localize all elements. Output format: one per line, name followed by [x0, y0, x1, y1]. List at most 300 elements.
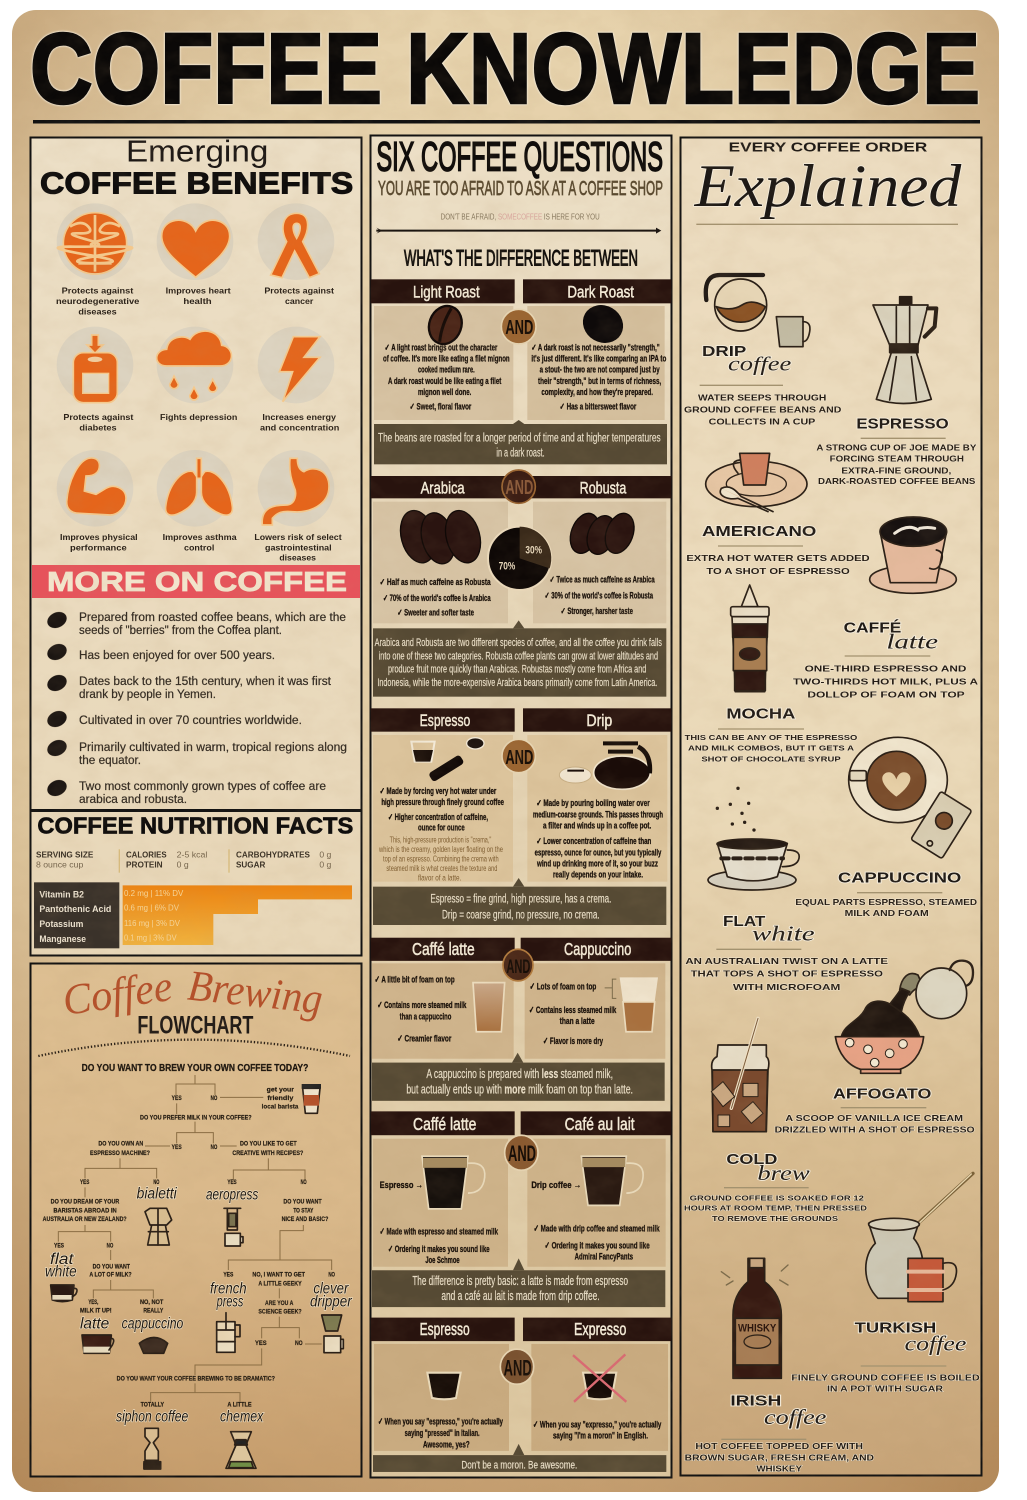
benefit labels: diseases	[279, 553, 316, 563]
flowchart questions and answers: DO YOU DREAM OF YOUR	[51, 1198, 119, 1205]
comparison: light roast and dark roast: AND	[505, 316, 533, 339]
nutrition table: Potassium	[39, 919, 83, 929]
item: affogato	[775, 961, 975, 1135]
icon: bialetti moka pot	[145, 1208, 172, 1245]
comparison: espresso and drip: a filter and winds up in a coffee pot.	[543, 820, 651, 830]
comparison: caffe latte and cappuccino: ✓ Contains less steamed milk	[529, 1005, 617, 1015]
flowchart questions and answers: NO	[153, 1179, 159, 1186]
benefit labels: Improves asthma	[163, 532, 237, 542]
flowchart questions and answers: YES	[223, 1272, 234, 1279]
item: cold brew: TO REMOVE THE GROUNDS	[712, 1214, 838, 1223]
comparison: arabica and robusta: Indonesia, while the more-expensive Arabica beans primarily come from Latin America.	[377, 677, 657, 689]
nutrition table: Vitamin B2	[39, 889, 84, 899]
comparison: espresso and drip: Drip = coarse grind, no pressure, no crema.	[442, 907, 600, 921]
comparison: light roast and dark roast: in a dark roast.	[496, 446, 545, 460]
pie chart: 70% arabica, 30% robusta: 30%	[525, 544, 542, 556]
flowchart questions and answers: TOTALLY	[141, 1402, 164, 1409]
item: mocha	[685, 585, 858, 763]
icon: moka pot	[873, 297, 936, 403]
icon: heart	[162, 220, 230, 277]
item: flat white: AN AUSTRALIAN TWIST ON A LATTE	[685, 956, 889, 966]
flowchart coffee names: dripper	[310, 1294, 352, 1311]
comparison: caffe latte and cafe au lait: Espresso →	[380, 1180, 423, 1190]
benefit labels: neurodegenerative	[56, 296, 140, 306]
benefit labels	[56, 285, 342, 563]
flowchart questions and answers: local barista	[262, 1103, 299, 1110]
comparison: light roast and dark roast: The beans are roasted for a longer period of time and at higher temperatures	[378, 431, 661, 445]
list: more on coffee facts: drank by people in Yemen.	[79, 689, 216, 701]
flowchart questions and answers: DO YOU WANT YOUR COFFEE BREWING TO BE DRAMATIC?	[117, 1376, 275, 1383]
item: caffe latte: ONE-THIRD ESPRESSO AND	[805, 664, 966, 674]
icon: caffe latte cup	[870, 517, 956, 593]
flowchart questions and answers: YES	[172, 1095, 182, 1102]
comparison: light roast and dark roast: ✓ A dark roast is not necessarily "strength,"	[531, 343, 660, 353]
pie chart: 70% arabica, 30% robusta: 70%	[499, 560, 516, 572]
comparison: light roast and dark roast: ✓ A light roast brings out the character	[385, 343, 498, 353]
item: irish coffee: WHISKEY	[756, 1463, 803, 1473]
comparison: espresso and expresso: AND	[504, 1357, 532, 1381]
nutrition summary: SUGAR	[236, 860, 265, 870]
icon: cold brew jar	[711, 1018, 769, 1132]
comparison: light roast and dark roast: ✓ Has a bittersweet flavor	[560, 401, 637, 411]
list: more on coffee facts: arabica and robusta.	[79, 794, 187, 806]
item: mocha: AND MILK COMBOS, BUT IT GETS A	[688, 744, 855, 753]
panel: every coffee order explained	[680, 138, 982, 1476]
benefit labels: Increases energy	[262, 412, 336, 422]
item: americano: TO A SHOT OF ESPRESSO	[706, 566, 850, 576]
item: mocha: THIS CAN BE ANY OF THE ESPRESSO	[685, 733, 858, 742]
comparison: caffe latte and cafe au lait: AND	[508, 1142, 536, 1166]
flowchart questions and answers: YES	[54, 1243, 64, 1250]
flowchart questions and answers: NO	[211, 1144, 217, 1151]
flowchart coffee names: french	[210, 1280, 247, 1297]
item: americano: AMERICANO	[702, 524, 816, 540]
item: espresso: ESPRESSO	[856, 416, 949, 432]
item: cappuccino: EQUAL PARTS ESPRESSO, STEAMED	[795, 897, 977, 907]
icon: takeaway cup	[302, 1084, 321, 1113]
icon: latte cup with espresso	[422, 1156, 485, 1209]
nutrition summary	[36, 849, 332, 873]
comparison: arabica and robusta: ✓ Sweeter and softer taste	[397, 608, 474, 618]
nutrition summary: PROTEIN	[126, 860, 163, 870]
heading: coffee brewing flowchart: Brewing	[186, 962, 325, 1023]
comparison: caffe latte and cappuccino: ✓ Creamier flavor	[397, 1033, 452, 1044]
flowchart questions and answers: NO, I WANT TO GET	[252, 1272, 305, 1279]
comparison: caffe latte and cappuccino: AND	[506, 956, 530, 978]
comparison: espresso and drip: Espresso	[420, 711, 470, 730]
nutrition summary: CALORIES	[126, 850, 167, 860]
benefit labels: health	[183, 296, 212, 306]
flowchart questions and answers: TO STAY	[293, 1207, 314, 1214]
comparison: caffe latte and cafe au lait: ✓ Ordering it makes you sound like	[388, 1244, 490, 1254]
item: cappuccino: CAPPUCCINO	[838, 870, 961, 886]
heading: coffee brewing flowchart: FLOWCHART	[137, 1011, 254, 1039]
flowchart coffee names: chemex	[220, 1409, 264, 1426]
comparison: espresso and expresso	[371, 1318, 671, 1472]
list: more on coffee facts: Two most commonly grown types of coffee are	[79, 781, 326, 793]
comparison: espresso and drip: ounce for ounce	[418, 823, 465, 833]
comparison: espresso and drip: wind up drinking more of it, so your buzz	[536, 859, 658, 869]
icon: espresso shot and portafilter	[411, 738, 484, 782]
item: irish coffee: coffee	[764, 1407, 826, 1429]
nutrition summary: 2-5 kcal	[177, 850, 207, 860]
flowchart questions and answers: DO YOU WANT	[93, 1263, 130, 1270]
panel: coffee brewing flowchart	[30, 962, 362, 1476]
flowchart coffee names: press	[216, 1294, 244, 1311]
comparison: arabica and robusta: into one of these two categories. Robusta coffee plants can grow at lower altitudes and	[379, 650, 658, 662]
benefit labels: performance	[70, 543, 127, 553]
item: flat white: WITH MICROFOAM	[733, 982, 840, 992]
icon: crossed-out expresso cup	[573, 1354, 626, 1402]
icon: cezve and mug	[866, 1173, 973, 1302]
comparison: espresso and drip: Espresso = fine grind, high pressure, has a crema.	[430, 891, 611, 905]
icon: drip carafe and mug	[706, 275, 810, 347]
item: drip coffee	[684, 275, 841, 427]
item: irish coffee: IRISH	[730, 1394, 781, 1410]
banner: more on coffee: MORE ON COFFEE	[47, 566, 347, 597]
item: caffe latte: CAFFÉ	[844, 619, 902, 636]
nutrition table: Manganese	[39, 934, 86, 944]
comparison: light roast and dark roast: Dark Roast	[567, 283, 634, 302]
item: caffe latte: latte	[886, 632, 938, 654]
list: more on coffee facts: Cultivated in over 70 countries worldwide.	[79, 715, 302, 727]
comparison: arabica and robusta: ✓ 30% of the world's coffee is Robusta	[545, 590, 654, 600]
flowchart questions and answers: A LOT OF MILK?	[89, 1272, 132, 1279]
icon: flat white cup and saucer	[708, 839, 799, 890]
comparison: arabica and robusta: Robusta	[580, 478, 627, 497]
comparison: arabica and robusta: ✓ Twice as much caffeine as Arabica	[550, 574, 655, 584]
comparison: arabica and robusta: Arabica	[421, 478, 465, 497]
comparison: light roast and dark roast: it's just different. It's like comparing an IPA to	[531, 354, 667, 364]
comparison: espresso and expresso: saying "I'm a moron" in English.	[553, 1430, 648, 1441]
item: americano: EXTRA HOT WATER GETS ADDED	[686, 553, 870, 563]
flowchart questions and answers: get your	[267, 1087, 294, 1094]
nutrition summary: 8 ounce cup	[36, 860, 84, 870]
benefit labels: Protects against	[62, 285, 134, 295]
comparison: espresso and expresso: ✓ When you say "expresso," you're actually	[533, 1419, 662, 1429]
flowchart coffee names: clever	[313, 1280, 349, 1297]
item: espresso: DARK-ROASTED COFFEE BEANS	[818, 476, 976, 486]
nutrition table: 0.2 mg | 11% DV	[124, 888, 184, 898]
list: more on coffee facts: Prepared from roasted coffee beans, which are the	[79, 612, 346, 624]
flowchart questions and answers: NO	[301, 1179, 307, 1186]
icon: cappuccino glass	[605, 977, 658, 1032]
item: cappuccino: MILK AND FOAM	[845, 908, 929, 918]
flowchart coffee names	[45, 1185, 352, 1426]
item: caffe latte: TWO-THIRDS HOT MILK, PLUS A	[793, 676, 978, 686]
item: affogato: A SCOOP OF VANILLA ICE CREAM	[785, 1113, 963, 1123]
comparison: light roast and dark roast: mignon well done.	[418, 387, 471, 397]
heading: coffee brewing flowchart: DO YOU WANT TO BREW YOUR OWN COFFEE TODAY?	[82, 1063, 308, 1074]
comparison: caffe latte and cafe au lait: ✓ Made with drip coffee and steamed milk	[534, 1223, 660, 1234]
flowchart questions and answers: YES	[80, 1179, 90, 1186]
comparison: caffe latte and cafe au lait: and a café au lait is made from drip coffee.	[441, 1289, 600, 1303]
heading: coffee nutrition facts: COFFEE NUTRITION FACTS	[37, 813, 353, 839]
comparison: espresso and drip: which is the creamy, golden layer floating on the	[378, 844, 503, 854]
comparison: caffe latte and cafe au lait: Admiral FancyPants	[575, 1252, 633, 1262]
comparison: espresso and drip: ✓ Made by forcing very hot water under	[380, 786, 497, 796]
icon: clever dripper	[322, 1315, 343, 1353]
flowchart questions and answers: YES	[172, 1144, 182, 1151]
icon: french press	[217, 1313, 240, 1352]
comparison: espresso and drip: flavor of a latte.	[418, 873, 461, 883]
comparison: light roast and dark roast: of coffee. It's more like eating a filet mignon	[383, 354, 510, 364]
icon: flat white cup	[51, 1285, 77, 1302]
comparison: espresso and drip: AND	[505, 746, 533, 769]
heading: emerging coffee benefits	[40, 135, 353, 200]
flowchart questions and answers: BARISTAS ABROAD IN	[53, 1207, 117, 1214]
flowchart coffee names: bialetti	[137, 1185, 177, 1202]
flowchart questions and answers: AUSTRALIA OR NEW ZEALAND?	[43, 1216, 127, 1223]
flowchart coffee names: latte	[80, 1315, 109, 1332]
item: flat white: white	[752, 924, 815, 946]
comparison: caffe latte and cafe au lait: Café au lait	[565, 1115, 635, 1134]
nutrition summary: 0 g	[319, 860, 332, 870]
item: cold brew: GROUND COFFEE IS SOAKED FOR 12	[690, 1194, 864, 1203]
icon: lightning bolt	[279, 337, 320, 402]
comparison: caffe latte and cappuccino: than a cappuccino	[400, 1011, 452, 1021]
comparison: espresso and drip: Drip	[586, 711, 612, 730]
icon: stomach	[262, 458, 329, 525]
flowchart coffee names: cappuccino	[122, 1315, 184, 1332]
comparison: espresso and drip: high pressure through finely ground coffee	[381, 797, 504, 807]
item: cappuccino	[795, 737, 977, 918]
comparison: light roast and dark roast: Light Roast	[413, 283, 480, 302]
comparison: light roast and dark roast: A dark roast would be like eating a filet	[388, 376, 501, 386]
icon: mocha takeaway cup	[731, 585, 769, 692]
nutrition summary: CARBOHYDRATES	[236, 850, 310, 860]
comparison: caffe latte and cappuccino: A cappuccino is prepared with less steamed milk,	[426, 1067, 613, 1081]
benefit labels: Protects against	[264, 285, 334, 295]
flowchart questions and answers: DO YOU PREFER MILK IN YOUR COFFEE?	[140, 1114, 252, 1121]
item: drip coffee: COLLECTS IN A CUP	[709, 417, 816, 427]
icon: cancer ribbon	[271, 213, 319, 278]
benefit labels: Protects against	[63, 412, 134, 422]
icon: affogato bowl and pouring pitcher	[835, 961, 973, 1073]
item: flat white	[685, 787, 889, 992]
list: more on coffee facts: Has been enjoyed for over 500 years.	[79, 650, 275, 662]
benefit labels: Improves heart	[166, 285, 231, 295]
flowchart questions and answers: A LITTLE	[227, 1402, 252, 1409]
benefit labels: diseases	[78, 306, 117, 316]
comparison: caffe latte and cappuccino: Cappuccino	[564, 940, 631, 959]
icon: steam dots	[716, 787, 756, 832]
flowchart questions and answers: ESPRESSO MACHINE?	[90, 1150, 150, 1157]
icon: drip carafe and cup	[559, 743, 650, 789]
item: drip coffee: GROUND COFFEE BEANS AND	[684, 405, 841, 415]
comparison: caffe latte and cafe au lait: ✓ Ordering it makes you sound like	[545, 1240, 650, 1251]
flowchart questions and answers: NO	[295, 1340, 303, 1347]
flowchart coffee names: white	[45, 1264, 77, 1281]
comparison: caffe latte and cappuccino: ✓ Flavor is more dry	[543, 1036, 604, 1046]
item: irish coffee: BROWN SUGAR, FRESH CREAM, AND	[685, 1453, 874, 1463]
benefit labels: control	[184, 543, 214, 553]
heading: six coffee questions	[376, 134, 663, 271]
item: cold brew	[684, 1018, 867, 1223]
section: coffee nutrition facts	[34, 813, 353, 948]
comparison: espresso and drip: ✓ Made by pouring boiling water over	[536, 798, 650, 808]
comparison: light roast and dark roast: ✓ Sweet, floral flavor	[410, 401, 472, 411]
comparison: caffe latte and cafe au lait: ✓ Made with espresso and steamed milk	[380, 1226, 499, 1237]
flowchart questions and answers: MILK IT UP!	[80, 1308, 112, 1315]
nutrition summary: 0 g	[319, 850, 332, 860]
item: espresso: FORCING STEAM THROUGH	[830, 454, 964, 464]
comparison: espresso and drip: ✓ Higher concentration of caffeine,	[388, 812, 488, 822]
flowchart coffee names: aeropress	[206, 1186, 259, 1203]
flowchart questions and answers: A LITTLE GEEKY	[258, 1281, 302, 1288]
flowchart coffee names: siphon coffee	[116, 1409, 188, 1426]
comparison: espresso and expresso: saying "pressed" in Italian.	[405, 1428, 480, 1438]
flowchart questions and answers: REALLY	[143, 1308, 164, 1315]
comparison: arabica and robusta: ✓ Half as much caffeine as Robusta	[380, 577, 491, 587]
comparison: espresso and drip: really depends on your intake.	[553, 869, 643, 879]
icon: aeropress	[224, 1208, 243, 1246]
item: flat white: FLAT	[723, 914, 765, 930]
item: turkish coffee	[791, 1173, 980, 1394]
heading: six coffee questions: DON'T BE AFRAID, SOMECOFFEE IS HERE FOR YOU	[441, 211, 600, 221]
flowchart questions and answers	[43, 1087, 335, 1409]
icon: brain	[58, 213, 132, 274]
comparison: espresso and drip: This, high-pressure production is "crema,"	[390, 835, 491, 845]
panel: six coffee questions	[370, 134, 672, 1478]
nutrition table: Pantothenic Acid	[39, 904, 112, 914]
flowchart questions and answers: NICE AND BASIC?	[282, 1216, 328, 1223]
heading: every coffee order explained: EVERY COFFEE ORDER	[729, 140, 928, 155]
item: cold brew: COLD	[726, 1152, 777, 1168]
benefit labels: cancer	[285, 296, 314, 306]
icon: chemex	[226, 1432, 256, 1468]
item: espresso: A STRONG CUP OF JOE MADE BY	[816, 443, 977, 453]
icon: glucose meter	[73, 335, 117, 403]
nutrition summary: 0 g	[177, 860, 189, 870]
flowchart questions and answers: DO YOU WANT	[283, 1198, 322, 1205]
item: cold brew: brew	[757, 1163, 810, 1185]
flowchart questions and answers: DO YOU LIKE TO GET	[240, 1141, 297, 1148]
nutrition table: 0.1 mg | 3% DV	[124, 933, 177, 943]
icon: espresso cup	[427, 1373, 461, 1399]
comparison: caffe latte and cappuccino: than a latte	[560, 1016, 595, 1026]
list: more on coffee facts: seeds of "berries" from the Coffea plant.	[79, 625, 282, 637]
flowchart questions and answers: ARE YOU A	[265, 1300, 293, 1307]
comparison: espresso and drip: medium-coarse grounds. This passes through	[533, 809, 663, 819]
flowchart questions and answers: NO	[211, 1095, 217, 1102]
item: caffe latte: DOLLOP OF FOAM ON TOP	[807, 689, 965, 699]
comparison: arabica and robusta: Arabica and Robusta are two different species of coffee, and all the coffee you drink falls	[375, 637, 662, 649]
heading: six coffee questions: SIX COFFEE QUESTIONS	[376, 134, 663, 180]
heading: six coffee questions: YOU ARE TOO AFRAID TO ASK AT A COFFEE SHOP	[378, 178, 663, 200]
comparison: espresso and expresso: Espresso	[420, 1320, 470, 1339]
list: more on coffee facts: the equator.	[79, 755, 141, 767]
flowchart questions and answers: NO	[328, 1272, 335, 1279]
comparison: espresso and expresso: ✓ When you say "espresso," you're actually	[378, 1416, 504, 1427]
benefit labels: diabetes	[79, 423, 117, 433]
comparison: caffe latte and cappuccino: but actually ends up with more milk foam on top than latte.	[406, 1082, 633, 1097]
comparison: light roast and dark roast	[371, 279, 671, 464]
item: irish coffee: HOT COFFEE TOPPED OFF WITH	[695, 1441, 863, 1451]
item: drip coffee: DRIP	[702, 344, 747, 360]
pie chart: 70% arabica, 30% robusta	[488, 527, 551, 590]
comparison: caffe latte and cappuccino: ✓ Contains more steamed milk	[377, 1000, 467, 1010]
flowchart connector lines	[58, 1075, 332, 1402]
list: more on coffee facts	[45, 609, 347, 806]
icon: lungs	[166, 458, 232, 515]
comparison: espresso and expresso: Awesome, yes?	[423, 1439, 470, 1449]
item: cold brew: HOURS AT ROOM TEMP, THEN PRESSED	[684, 1204, 867, 1213]
nutrition table: 0.6 mg | 6% DV	[124, 903, 179, 913]
flowchart questions and answers: YES	[255, 1340, 267, 1347]
item: espresso: EXTRA-FINE GROUND,	[841, 465, 951, 475]
comparison: espresso and drip	[371, 708, 671, 925]
nutrition table	[34, 882, 352, 948]
comparison: caffe latte and cafe au lait	[371, 1111, 671, 1307]
item: americano	[686, 453, 870, 576]
comparison: caffe latte and cafe au lait: Joe Schmoe	[425, 1255, 460, 1265]
list: more on coffee facts: Dates back to the 15th century, when it was first	[79, 676, 332, 688]
benefit labels: Improves physical	[60, 532, 138, 542]
comparison: caffe latte and cappuccino: ✓ Lots of foam on top	[530, 981, 597, 992]
flowchart questions and answers: SCIENCE GEEK?	[258, 1308, 302, 1315]
icon: siphon coffee	[144, 1428, 161, 1469]
flowchart questions and answers: NO	[107, 1243, 113, 1250]
comparison: arabica and robusta	[371, 470, 671, 697]
item: flat white: THAT TOPS A SHOT OF ESPRESSO	[691, 969, 884, 979]
heading: every coffee order explained: Explained	[694, 153, 962, 219]
comparison: light roast and dark roast: a stout- the two are not compared just by	[540, 365, 660, 375]
comparison: arabica and robusta: AND	[505, 476, 533, 499]
heading: six coffee questions: WHAT'S THE DIFFERENCE BETWEEN	[404, 246, 638, 271]
heading: emerging coffee benefits: Emerging	[126, 135, 268, 169]
benefit labels: gastrointestinal	[265, 543, 332, 553]
flowchart questions and answers: YES	[227, 1179, 237, 1186]
icon: whisky bottle	[721, 1258, 788, 1378]
comparison: caffe latte and cappuccino	[371, 938, 671, 1101]
icon: latte glass	[473, 983, 505, 1032]
flowchart questions and answers: NO, NOT	[140, 1299, 163, 1306]
comparison: caffe latte and cappuccino: ✓ A little bit of foam on top	[375, 974, 455, 985]
comparison: espresso and drip: top of an espresso. Combining the crema with	[383, 853, 499, 863]
heading: coffee brewing flowchart: Coffee	[60, 962, 175, 1025]
comparison: espresso and drip: steamed milk is what creates the texture and	[386, 863, 498, 873]
item: turkish coffee: FINELY GROUND COFFEE IS BOILED	[791, 1373, 980, 1383]
item: drip coffee: coffee	[728, 354, 791, 376]
icon: americano cup on saucer	[706, 453, 807, 512]
comparison: espresso and expresso: Don't be a moron. Be awesome.	[461, 1459, 577, 1472]
item: turkish coffee: coffee	[905, 1334, 966, 1356]
list: more on coffee facts: Primarily cultivated in warm, tropical regions along	[79, 742, 347, 754]
flowchart questions and answers: friendly	[267, 1095, 294, 1102]
item: affogato: DRIZZLED WITH A SHOT OF ESPRESSO	[775, 1125, 975, 1135]
item: irish coffee	[685, 1258, 874, 1473]
icon: flexed arm	[67, 458, 126, 515]
panel: emerging coffee benefits	[30, 135, 362, 955]
flowchart questions and answers: YES,	[88, 1299, 98, 1306]
benefit labels: Lowers risk of select	[254, 532, 342, 542]
flowchart questions and answers: CREATIVE WITH RECIPES?	[232, 1150, 303, 1157]
comparison: caffe latte and cafe au lait: The difference is pretty basic: a latte is made from espresso	[412, 1274, 628, 1288]
comparison: espresso and drip: ✓ Lower concentration of caffeine than	[536, 836, 651, 846]
icon: latte cup	[82, 1335, 114, 1353]
comparison: caffe latte and cafe au lait: Caffé latte	[413, 1115, 476, 1134]
flowchart coffee names: flat	[50, 1251, 74, 1268]
comparison: light roast and dark roast: their "strength," but in terms of richness,	[538, 376, 661, 386]
benefit labels: and concentration	[260, 423, 339, 433]
comparison: caffe latte and cappuccino: Caffé latte	[412, 940, 475, 959]
item: caffe latte	[793, 619, 978, 699]
comparison: espresso and expresso: Expresso	[574, 1320, 626, 1339]
nutrition summary: SERVING SIZE	[36, 850, 94, 860]
comparison: light roast and dark roast: complexity, and how they're prepared.	[541, 387, 653, 397]
comparison: arabica and robusta: ✓ 70% of the world's coffee is Arabica	[383, 593, 491, 603]
